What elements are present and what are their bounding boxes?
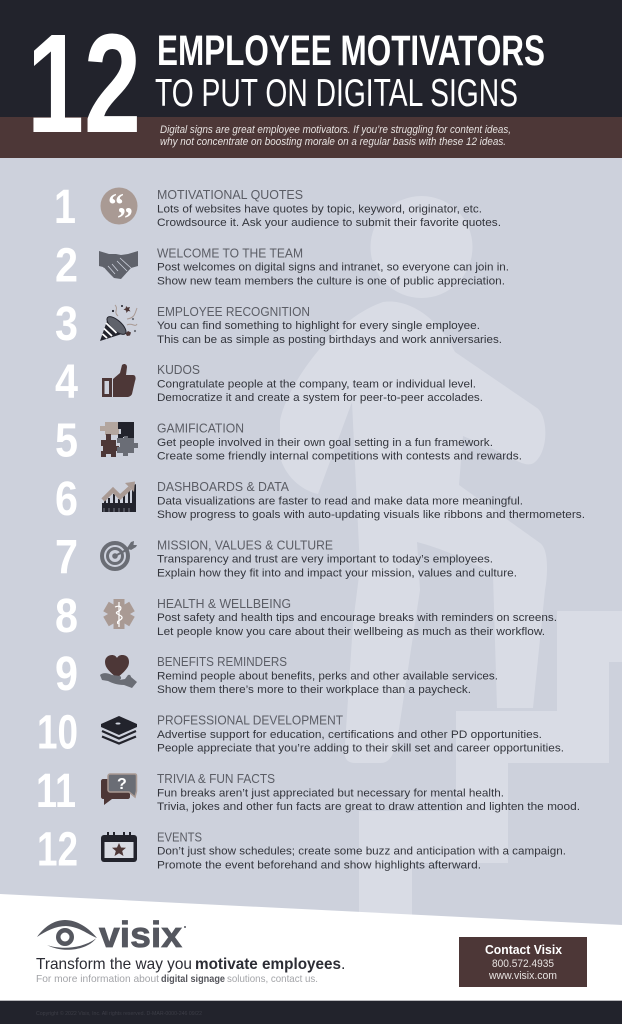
- icon: speech bubbles with question mark: [101, 774, 136, 805]
- item 3: employee recognition: 3: [55, 298, 78, 351]
- icon: medical star: [103, 599, 135, 629]
- item 11: trivia and fun facts: 11: [36, 765, 76, 818]
- item 5: gamification: GAMIFICATION: [157, 421, 244, 436]
- item 5: gamification: 5: [55, 415, 78, 468]
- bottom bar: [0, 1000, 622, 1024]
- item 9: benefits reminders: [55, 648, 498, 701]
- icon: stack of books: [101, 716, 137, 744]
- item 4: kudos: Congratulate people at the company, team or individual level.: [157, 378, 476, 390]
- logo: visix eye: visix: [99, 914, 182, 955]
- bottom bar: Copyright © 2022 Visix, Inc. All rights reserved. D-MAR-0000-246 09/22: [36, 1010, 202, 1017]
- icon: quotation marks: “: [108, 186, 124, 222]
- icon: party popper: [100, 305, 137, 341]
- item 4: kudos: KUDOS: [157, 362, 200, 377]
- item 5: gamification: Create some friendly internal competitions with contests and rewards.: [157, 451, 522, 463]
- item 6: dashboards and data: DASHBOARDS & DATA: [157, 479, 289, 494]
- icon: puzzle pieces: [100, 422, 138, 457]
- tagline subtext: For more information about: [36, 973, 159, 985]
- contact box: [459, 937, 587, 987]
- item 2: welcome to the team: Show new team members the culture is one of public appreciation.: [157, 275, 505, 287]
- item 3: employee recognition: This can be as simple as posting birthdays and work anniversaries.: [157, 334, 502, 346]
- item 9: benefits reminders: Remind people about benefits, perks and other available services.: [157, 670, 498, 682]
- item 3: employee recognition: [55, 298, 502, 351]
- item 11: trivia and fun facts: Trivia, jokes and other fun facts are great to draw attention and lighten the mood.: [157, 801, 580, 813]
- big number 12: 12: [27, 4, 141, 162]
- item 6: dashboards and data: Show progress to goals with auto-updating visuals like ribbons and thermometers.: [157, 509, 585, 521]
- footer white panel: [0, 894, 622, 1001]
- icon: quotation marks: [100, 186, 138, 236]
- tagline subtext: [36, 973, 318, 985]
- contact box: www.visix.com: [488, 970, 557, 982]
- intro band: [0, 117, 622, 158]
- item 3: employee recognition: You can find something to highlight for every single employee.: [157, 320, 480, 332]
- item 8: health and wellbeing: Post safety and health tips and encourage breaks with reminders on screens.: [157, 612, 557, 624]
- item 4: kudos: 4: [55, 356, 78, 409]
- tagline subtext: digital signage: [161, 973, 225, 985]
- icon: bar chart with arrow: [102, 482, 136, 512]
- icon: quotation marks: ”: [117, 200, 133, 236]
- item 7: mission values and culture: 7: [55, 531, 78, 584]
- item 5: gamification: [55, 415, 522, 468]
- item 7: mission values and culture: [55, 531, 517, 584]
- item 10: professional development: Advertise support for education, certifications and other PD opportunities.: [157, 729, 542, 741]
- tagline: motivate employees: [195, 956, 341, 973]
- item 9: benefits reminders: BENEFITS REMINDERS: [157, 654, 287, 669]
- intro text: Digital signs are great employee motivators. If you’re struggling for content ideas,: [160, 124, 511, 136]
- item 8: health and wellbeing: Let people know you care about their wellbeing as much as their workflow.: [157, 626, 545, 638]
- item 2: welcome to the team: Post welcomes on digital signs and intranet, so everyone can join in.: [157, 262, 509, 274]
- item 2: welcome to the team: [55, 239, 509, 292]
- item 12: events: EVENTS: [157, 829, 202, 844]
- item 10: professional development: 10: [37, 707, 78, 760]
- icon: heart in hand: [100, 655, 137, 688]
- item 2: welcome to the team: 2: [55, 239, 78, 292]
- tagline: [36, 956, 345, 973]
- item 9: benefits reminders: 9: [55, 648, 78, 701]
- icon: target with dart: [102, 541, 137, 569]
- item 4: kudos: [55, 356, 483, 409]
- intro text: [160, 124, 511, 148]
- item 1: motivational quotes: 1: [54, 181, 76, 234]
- item 6: dashboards and data: 6: [55, 473, 78, 526]
- contact box: Contact Visix: [485, 943, 562, 957]
- icon: thumbs up: [102, 364, 136, 397]
- icon: speech bubbles with question mark: ?: [117, 776, 127, 793]
- item 8: health and wellbeing: HEALTH & WELLBEING: [157, 596, 291, 611]
- logo: visix eye: [37, 914, 186, 955]
- item 7: mission values and culture: Transparency and trust are very important to today’s employees.: [157, 554, 493, 566]
- item 3: employee recognition: EMPLOYEE RECOGNITION: [157, 304, 310, 319]
- title: [155, 27, 545, 115]
- item 9: benefits reminders: Show them there’s more to their workplace than a paycheck.: [157, 684, 471, 696]
- item 8: health and wellbeing: 8: [55, 590, 78, 643]
- item 1: motivational quotes: Crowdsource it. Ask your audience to submit their favorite quotes.: [157, 217, 501, 229]
- item 11: trivia and fun facts: [36, 765, 580, 818]
- item 12: events: 12: [37, 823, 78, 876]
- item 7: mission values and culture: Explain how they fit into and impact your mission, values and culture.: [157, 567, 517, 579]
- item 1: motivational quotes: MOTIVATIONAL QUOTES: [157, 187, 303, 202]
- item 7: mission values and culture: MISSION, VALUES & CULTURE: [157, 537, 333, 552]
- tagline: .: [341, 956, 345, 973]
- item 10: professional development: PROFESSIONAL DEVELOPMENT: [157, 713, 343, 728]
- item 11: trivia and fun facts: Fun breaks aren’t just appreciated but necessary for mental health.: [157, 787, 504, 799]
- item 12: events: [37, 823, 566, 876]
- item 8: health and wellbeing: [55, 590, 557, 643]
- item 1: motivational quotes: [54, 181, 501, 236]
- header band: [0, 0, 622, 117]
- item 6: dashboards and data: Data visualizations are faster to read and make data more meaningful.: [157, 495, 523, 507]
- tagline subtext: solutions, contact us.: [227, 973, 318, 985]
- background illustration: person climbing stairs: [280, 196, 622, 930]
- item 5: gamification: Get people involved in their own goal setting in a fun framework.: [157, 437, 493, 449]
- item 2: welcome to the team: WELCOME TO THE TEAM: [157, 245, 303, 260]
- item 10: professional development: [37, 707, 564, 760]
- icon: handshake: [99, 251, 138, 279]
- item 10: professional development: People appreciate that you’re adding to their skill set and career opportunities.: [157, 743, 564, 755]
- icon: calendar with star: [101, 832, 137, 862]
- item 12: events: Promote the event beforehand and show highlights afterward.: [157, 859, 481, 871]
- item 6: dashboards and data: [55, 473, 585, 526]
- item 11: trivia and fun facts: TRIVIA & FUN FACTS: [157, 771, 275, 786]
- item 12: events: Don’t just show schedules; create some buzz and anticipation with a campaign.: [157, 846, 566, 858]
- intro text: why not concentrate on boosting morale on a regular basis with these 12 ideas.: [160, 136, 506, 148]
- item 4: kudos: Democratize it and create a system for peer-to-peer accolades.: [157, 392, 483, 404]
- tagline: Transform the way you: [36, 956, 192, 973]
- item 1: motivational quotes: Lots of websites have quotes by topic, keyword, originator, etc.: [157, 203, 482, 215]
- contact box: 800.572.4935: [492, 958, 554, 970]
